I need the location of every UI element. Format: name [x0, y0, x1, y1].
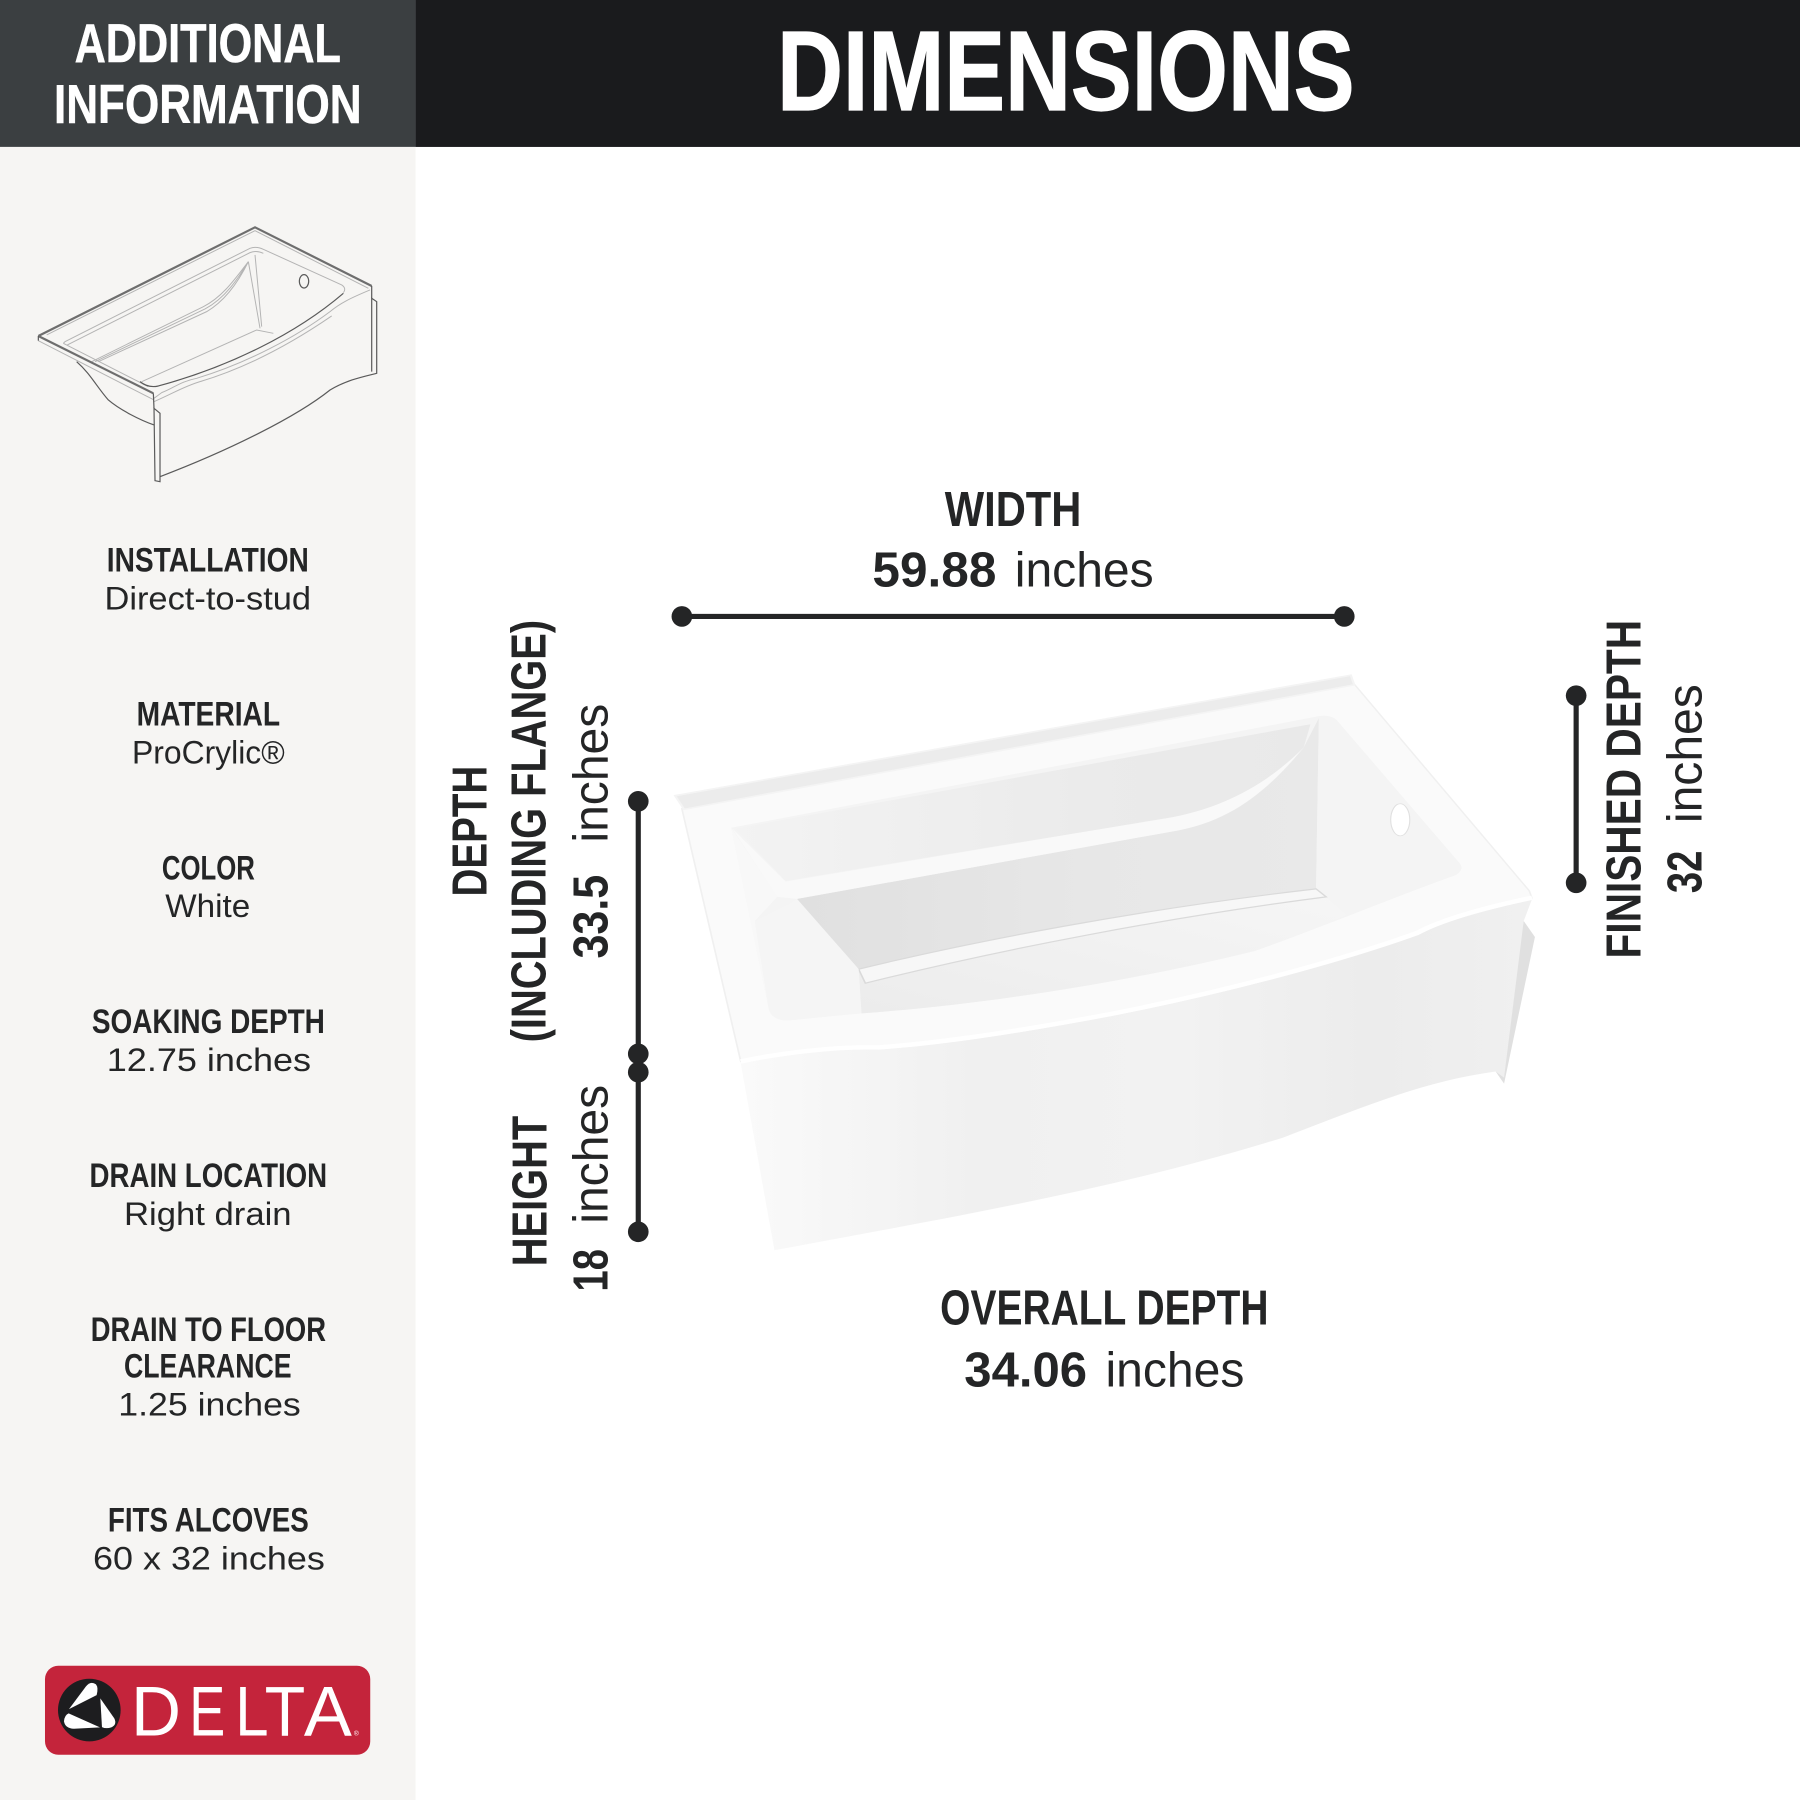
spec: fits alcoves — [93, 1501, 325, 1576]
width measure line — [672, 606, 1355, 627]
spec: drain location — [90, 1157, 327, 1232]
header: additional information — [0, 0, 416, 147]
tub front lip highlight — [741, 898, 1532, 1062]
tub front panel — [741, 899, 1532, 1250]
bathtub photo illustration — [675, 675, 1535, 1250]
tub deck — [682, 684, 1532, 1062]
spec: fits alcoves: 60 x 32 inches — [93, 1540, 325, 1576]
spec: color: COLOR — [162, 849, 255, 887]
basin left wall — [731, 828, 777, 1009]
spec: soaking depth: 12.75 inches — [107, 1042, 311, 1078]
spec: soaking depth — [92, 1003, 325, 1078]
depth measure line — [628, 791, 649, 1064]
dimension: finished depth: 32 — [1657, 851, 1712, 893]
drain hole — [1391, 804, 1410, 836]
spec: installation: INSTALLATION — [107, 542, 309, 580]
spec: drain location: DRAIN LOCATION — [90, 1157, 327, 1195]
basin seat ledge — [732, 748, 1304, 899]
tub back flange — [675, 675, 1354, 809]
spec: color — [162, 849, 255, 924]
spec: soaking depth: SOAKING DEPTH — [92, 1003, 325, 1041]
dimension: height: HEIGHT — [502, 1116, 557, 1266]
icon: bathtub line drawing — [38, 227, 377, 482]
dimension: overall depth: OVERALL DEPTH — [940, 1281, 1268, 1336]
spec: material: ProCrylic® — [132, 734, 285, 770]
basin rim — [731, 716, 1461, 1021]
logo: delta: E — [189, 1672, 225, 1751]
dimension: height — [502, 1062, 649, 1291]
dimension: depth including flange: DEPTH — [443, 766, 498, 897]
logo: delta: ® — [354, 1729, 359, 1737]
logo: delta — [45, 1666, 370, 1755]
dimension: depth including flange: inches — [563, 704, 618, 843]
spec: installation: Direct-to-stud — [104, 581, 311, 617]
dimension: depth including flange: 33.5 — [563, 875, 618, 959]
dimension: height: 18 — [563, 1249, 618, 1291]
dimension: width: inches — [1015, 543, 1154, 598]
basin left corner wall — [755, 899, 861, 1021]
dimension: width: WIDTH — [945, 482, 1081, 537]
dimension: height: inches — [563, 1085, 618, 1224]
logo: delta: T — [265, 1672, 305, 1751]
spec: drain to floor clearance: 1.25 inches — [118, 1386, 301, 1422]
basin floor — [859, 889, 1347, 1013]
tub right flange — [1496, 921, 1535, 1084]
spec: drain location: Right drain — [124, 1196, 292, 1232]
heading: additional information: INFORMATION — [54, 73, 362, 135]
logo: delta: A — [304, 1672, 352, 1751]
basin back wall above ledge — [735, 724, 1310, 881]
dimension: depth including flange: (INCLUDING FLANGE) — [501, 620, 556, 1042]
dimension: finished depth: FINISHED DEPTH — [1596, 620, 1651, 959]
spec: color: White — [165, 888, 250, 924]
spec: material — [132, 696, 285, 770]
dimension: overall depth: 34.06 — [964, 1343, 1087, 1398]
heading: additional information — [54, 12, 362, 135]
finished depth measure line — [1566, 685, 1586, 893]
dimension: width — [672, 482, 1355, 627]
panel: additional information — [0, 147, 416, 1800]
heading: additional information: ADDITIONAL — [75, 12, 341, 74]
spec: drain to floor clearance: DRAIN TO FLOOR — [91, 1311, 326, 1349]
height measure line — [628, 1062, 649, 1242]
basin lower wall — [797, 718, 1319, 969]
header: dimensions — [416, 0, 1800, 147]
spec: drain to floor clearance — [91, 1311, 326, 1422]
spec: installation — [104, 542, 311, 617]
dimension: depth including flange — [443, 620, 649, 1064]
spec: material: MATERIAL — [137, 696, 280, 734]
basin right wall — [1316, 718, 1461, 915]
heading: dimensions: DIMENSIONS — [777, 8, 1355, 135]
spec: drain to floor clearance: CLEARANCE — [124, 1348, 292, 1386]
basin floor lip — [859, 889, 1326, 983]
logo: delta: L — [235, 1672, 269, 1751]
dimension: finished depth — [1566, 620, 1712, 959]
spec: fits alcoves: FITS ALCOVES — [108, 1501, 309, 1539]
dimension: finished depth: inches — [1657, 684, 1712, 823]
dimension: overall depth: inches — [1105, 1343, 1244, 1398]
dimension: overall depth — [940, 1281, 1268, 1398]
dimension: width: 59.88 — [872, 543, 996, 598]
logo: delta: D — [131, 1672, 181, 1751]
